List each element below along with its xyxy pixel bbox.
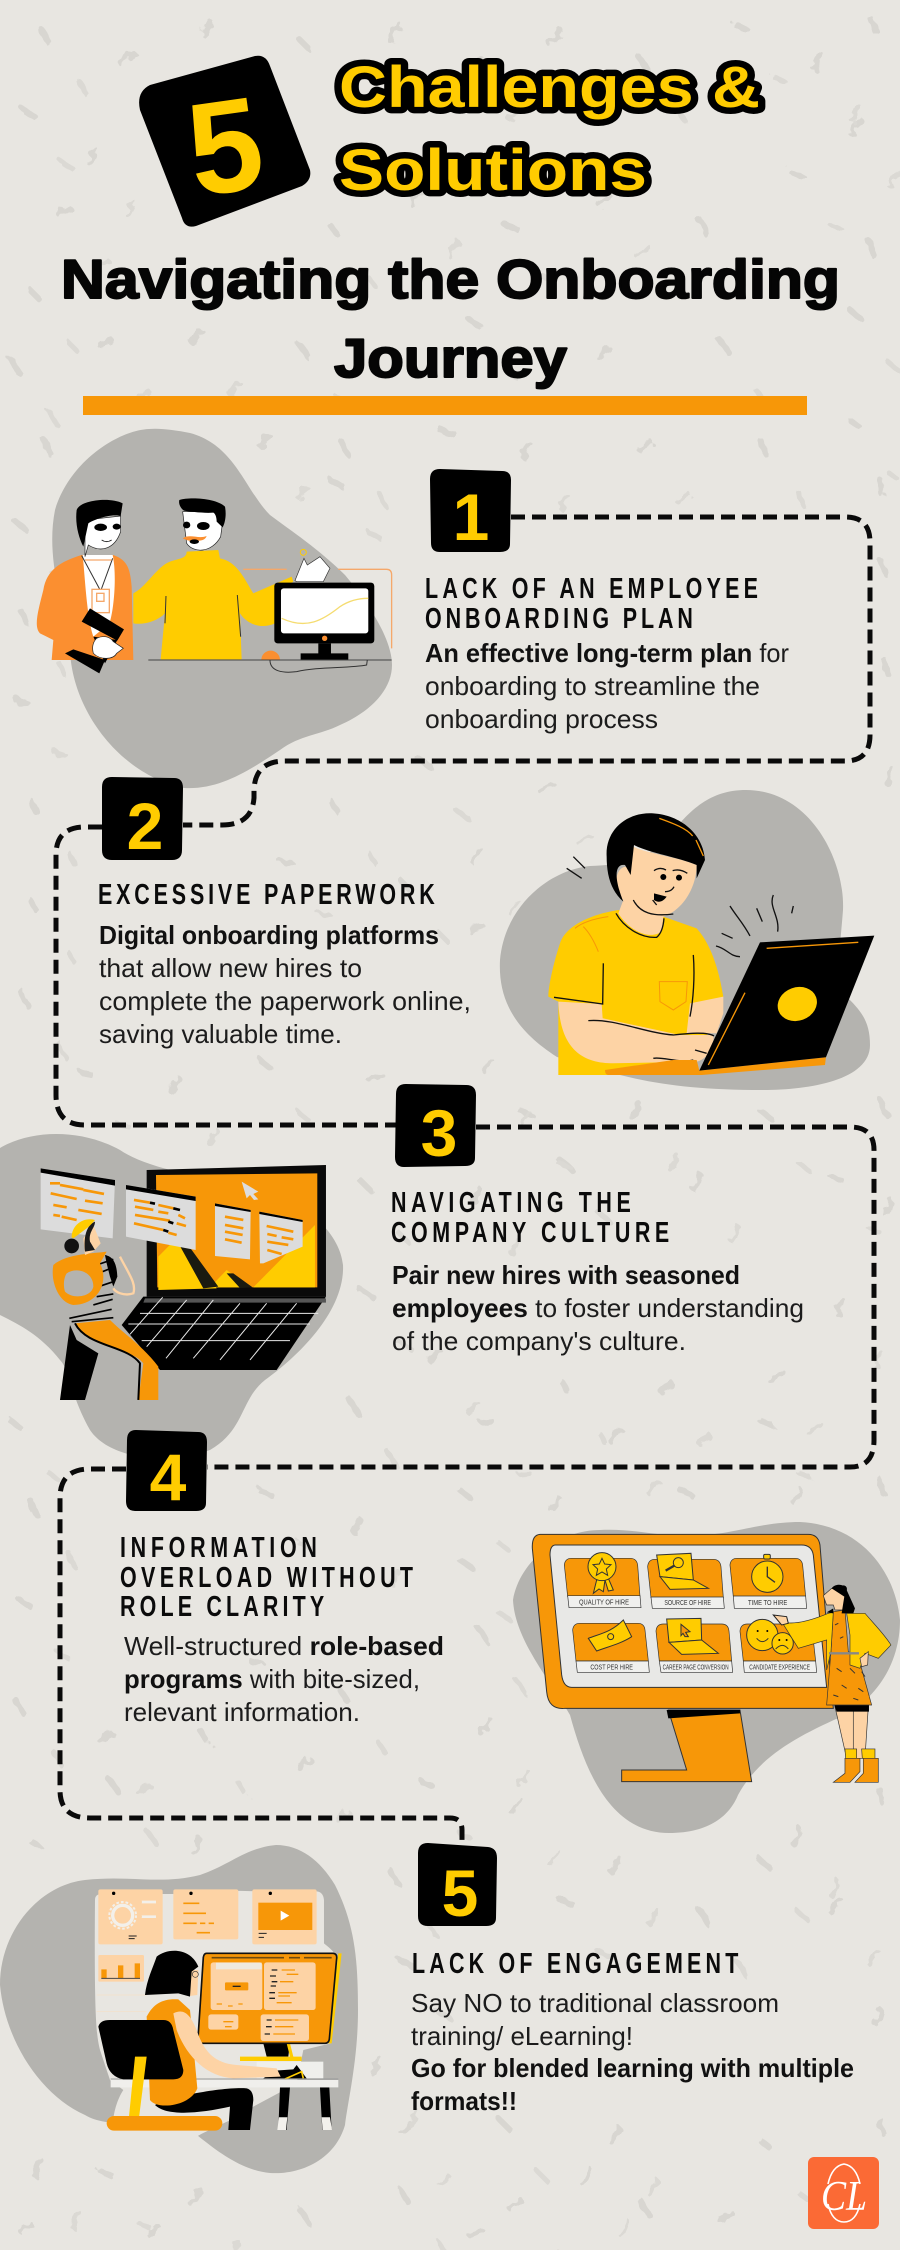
blob 3 <box>0 1134 343 1458</box>
body text 1: An effective long-term plan for <box>425 638 789 668</box>
illustration: woman presenting HR metrics on a screen: TIME TO HIRE <box>748 1598 787 1607</box>
illustration: woman presenting HR metrics on a screen: QUALITY OF HIRE <box>579 1597 629 1606</box>
body text 5: training/ eLearning! <box>411 2021 633 2051</box>
heading 1: ONBOARDING PLAN <box>425 603 693 635</box>
illustration: happy man at laptop <box>548 813 874 1075</box>
body text 1: onboarding process <box>425 704 658 734</box>
number badge 2 <box>102 777 183 863</box>
heading: Navigating the Onboarding Journey: Navigating the Onboarding <box>61 248 840 310</box>
heading 1 <box>425 573 758 635</box>
panel: challenge 4 <box>120 1430 900 1833</box>
blob 5 <box>0 1845 358 2173</box>
logo: CL: CL <box>821 2174 867 2220</box>
body text 5: Say NO to traditional classroom <box>411 1988 779 2018</box>
panel: challenge 5 <box>0 1843 854 2174</box>
body text 4: programs with bite-sized, <box>124 1664 420 1694</box>
body text 5: Go for blended learning with multiple <box>411 2053 854 2083</box>
body text 3 <box>392 1260 804 1356</box>
illustration: two colleagues at a monitor <box>37 498 392 673</box>
number badge 3 <box>395 1084 476 1170</box>
heading 5: LACK OF ENGAGEMENT <box>412 1948 739 1980</box>
heading 4: INFORMATION <box>120 1532 317 1564</box>
blob 2 <box>500 790 870 1090</box>
body text 2: saving valuable time. <box>99 1019 342 1049</box>
number badge 1: 1 <box>453 480 489 554</box>
connector: dashed path linking the five steps <box>56 517 874 1842</box>
heading 3 <box>391 1187 669 1249</box>
body text 2: Digital onboarding platforms <box>99 920 439 950</box>
body text 3: Pair new hires with seasoned <box>392 1260 740 1290</box>
body text 4 <box>124 1631 444 1727</box>
number badge 5 <box>418 1843 497 1930</box>
body text 2 <box>99 920 471 1049</box>
illustration: woman with giant laptop <box>41 1165 326 1400</box>
body text 4: Well-structured role-based <box>124 1631 444 1661</box>
heading: Challenges & Solutions: Challenges & <box>339 55 760 120</box>
heading 4 <box>120 1532 413 1623</box>
illustration: woman presenting HR metrics on a screen: CANDIDATE EXPERIENCE <box>749 1662 810 1671</box>
body text 5: formats!! <box>411 2086 517 2116</box>
heading: Challenges & Solutions: Solutions <box>339 138 647 203</box>
heading 3: NAVIGATING THE <box>391 1187 631 1219</box>
panel: challenge 3 <box>0 1084 879 2173</box>
heading 1: LACK OF AN EMPLOYEE <box>425 573 758 605</box>
number badge 1 <box>430 469 511 554</box>
body text 2: complete the paperwork online, <box>99 986 471 1016</box>
badge: big number 5 <box>139 56 310 227</box>
number badge 5: 5 <box>442 1856 478 1930</box>
illustration: woman presenting HR metrics on a screen: CAREER PAGE CONVERSION <box>663 1662 729 1671</box>
heading 2: EXCESSIVE PAPERWORK <box>98 879 435 911</box>
panel: challenge 1 <box>9 428 891 2173</box>
illustration: woman presenting HR metrics on a screen: SOURCE OF HIRE <box>664 1598 711 1607</box>
body text 3: employees to foster understanding <box>392 1293 804 1323</box>
heading: Navigating the Onboarding Journey <box>61 248 840 389</box>
heading 4: ROLE CLARITY <box>120 1591 324 1623</box>
body text 5 <box>411 1988 854 2116</box>
number badge 3: 3 <box>421 1096 457 1170</box>
number badge 4: 4 <box>150 1440 187 1514</box>
body text 1 <box>425 638 789 734</box>
orange divider bar <box>83 396 807 415</box>
illustration: woman working at desktop computer <box>95 1889 342 2143</box>
body text 1: onboarding to streamline the <box>425 671 760 701</box>
title block <box>61 55 840 415</box>
heading 3: COMPANY CULTURE <box>391 1217 669 1249</box>
heading: Navigating the Onboarding Journey: Journey <box>334 327 567 389</box>
logo: CL <box>808 2157 879 2229</box>
panel: challenge 2 <box>99 777 874 1090</box>
number badge 2: 2 <box>127 789 163 863</box>
body text 3: of the company's culture. <box>392 1326 686 1356</box>
blob 1 <box>52 429 392 788</box>
body text 2: that allow new hires to <box>99 953 362 983</box>
blob 4 <box>513 1522 900 1833</box>
illustration: woman presenting HR metrics on a screen <box>532 1534 891 1782</box>
illustration: woman presenting HR metrics on a screen: COST PER HIRE <box>590 1662 633 1671</box>
number badge 4 <box>126 1430 207 1514</box>
badge: big number 5: 5 <box>179 69 272 224</box>
body text 4: relevant information. <box>124 1697 360 1727</box>
heading 4: OVERLOAD WITHOUT <box>120 1562 413 1594</box>
heading: Challenges & Solutions <box>339 55 760 203</box>
